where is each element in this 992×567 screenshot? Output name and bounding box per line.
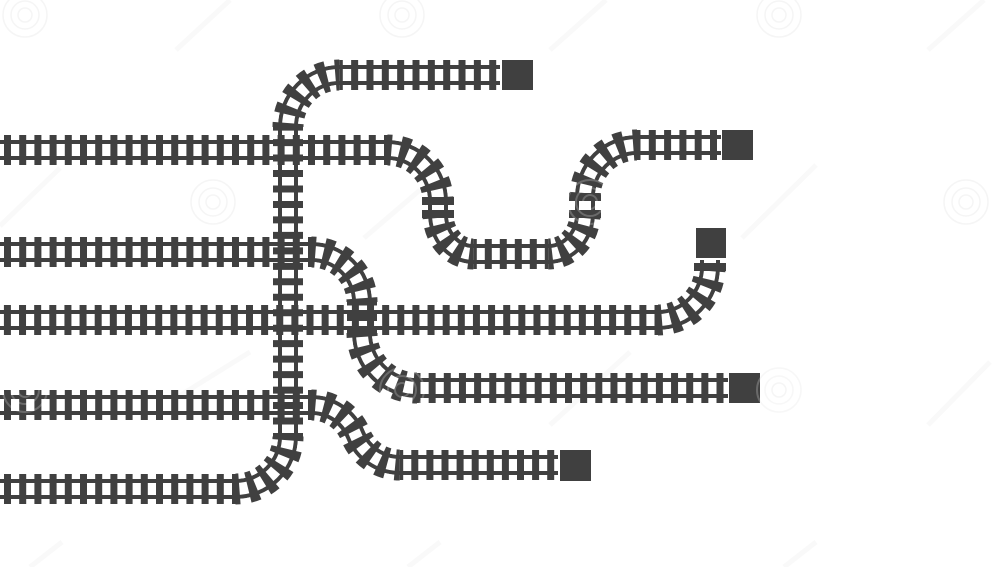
terminus square: top track bbox=[502, 60, 533, 90]
terminus square: lower S-bend track bbox=[560, 450, 591, 481]
terminus square: upward curving track bbox=[696, 228, 726, 258]
track: top terminus curving down to bottom left bbox=[0, 75, 500, 489]
terminus square: second line track bbox=[729, 373, 760, 403]
terminus square: upper S-bend track bbox=[722, 130, 753, 160]
track: straight middle line curving upward bbox=[0, 260, 726, 320]
track: lower line with S-bend bbox=[0, 405, 558, 465]
track: second line bending to lower right bbox=[0, 252, 728, 388]
track: upper line with S-bends bbox=[0, 145, 721, 254]
